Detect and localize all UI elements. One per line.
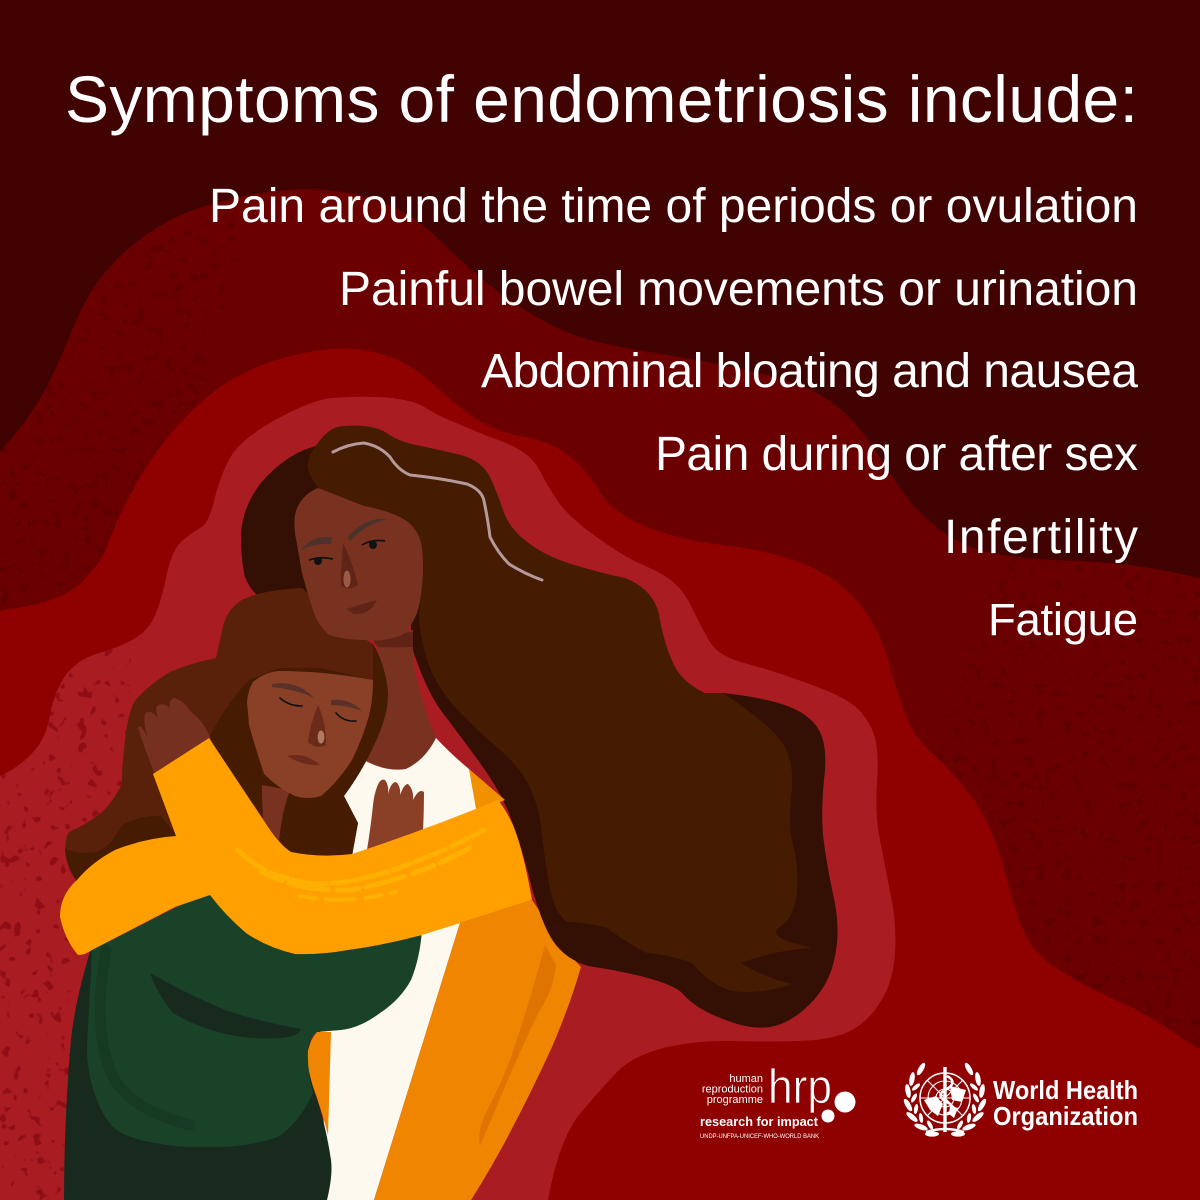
symptom 1: Pain around the time of periods or ovulation — [209, 180, 1138, 233]
back woman: main hair — [308, 426, 812, 992]
symptom 2: Painful bowel movements or urination — [339, 263, 1138, 316]
hrp tagline: research for impact — [700, 1115, 819, 1129]
coat: sliver beside sweater — [307, 1032, 331, 1135]
sleeve highlight — [238, 830, 484, 900]
WHO name: World Health — [993, 1075, 1138, 1105]
hair tip covering coat — [530, 880, 600, 968]
back woman: face — [294, 488, 423, 640]
back woman: dark hair underlayer — [411, 573, 838, 1028]
girl: nostril highlight — [318, 730, 324, 744]
girl: hair lower shadow — [65, 816, 180, 888]
girl: mouth — [287, 755, 320, 765]
WHO emblem — [902, 1062, 988, 1137]
symptom 5: Infertility — [944, 511, 1138, 564]
girl: inner hair — [209, 644, 388, 856]
back hand on girl's hair — [138, 698, 212, 778]
front hand on chest — [367, 780, 424, 850]
girl: sleeve fold — [150, 973, 301, 1038]
back woman: eyebrows — [300, 519, 389, 551]
symptoms list — [209, 180, 1138, 645]
back woman: neck shadow — [370, 632, 413, 648]
girl: green sweater — [87, 890, 422, 1147]
texture: crimson speckles left — [0, 640, 135, 1200]
hrp small label: programme — [707, 1094, 763, 1106]
illustration: two women embracing — [60, 426, 838, 1200]
girl: green body shadow — [64, 920, 332, 1200]
girl: closed eyes — [280, 698, 356, 721]
logo: World Health Organization: Organization — [993, 1101, 1138, 1131]
back woman: nose — [341, 543, 358, 588]
girl: face — [247, 671, 373, 798]
shirt: lower white — [320, 923, 460, 1200]
hrp wordmark: hrp — [768, 1061, 832, 1114]
hrp small label: human — [729, 1073, 763, 1085]
back woman: mouth — [346, 600, 377, 614]
yellow sleeve — [60, 738, 532, 955]
title: Symptoms of endometriosis include: — [65, 62, 1138, 136]
texture: dark layer speckles right — [930, 550, 1200, 1050]
girl: hair outer — [65, 588, 378, 885]
back woman: neck — [300, 630, 436, 770]
logo: HRP — [700, 1061, 856, 1140]
back woman: back hair — [241, 445, 320, 610]
back woman: grey hair strand — [333, 443, 542, 580]
hrp small label: reproduction — [702, 1084, 763, 1096]
girl: neck — [262, 785, 290, 843]
girl: eyebrows — [272, 683, 362, 711]
coat: right panel — [374, 900, 581, 1200]
logo: World Health Organization — [902, 1062, 1138, 1137]
symptom 6: Fatigue — [988, 594, 1138, 645]
background wave: bright red layer — [0, 349, 1200, 1200]
girl: nose — [308, 705, 326, 747]
girl: sweater brush strokes — [100, 950, 190, 1125]
coat: brush mark — [479, 945, 556, 1146]
coat: upper shoulder — [469, 769, 505, 812]
hrp dots — [822, 1092, 856, 1122]
back woman: eyes — [309, 540, 385, 565]
texture: dark layer speckles left — [0, 213, 238, 605]
shirt: upper white — [344, 738, 476, 856]
hrp partners: UNDP-UNFPA-UNICEF-WHO-WORLD BANK — [700, 1134, 819, 1140]
symptom 3: Abdominal bloating and nausea — [481, 345, 1138, 398]
back woman: nostril highlight — [343, 570, 351, 588]
background wave: crimson halo — [0, 397, 895, 1200]
symptom 4: Pain during or after sex — [655, 428, 1138, 481]
hrp small label — [702, 1073, 763, 1106]
